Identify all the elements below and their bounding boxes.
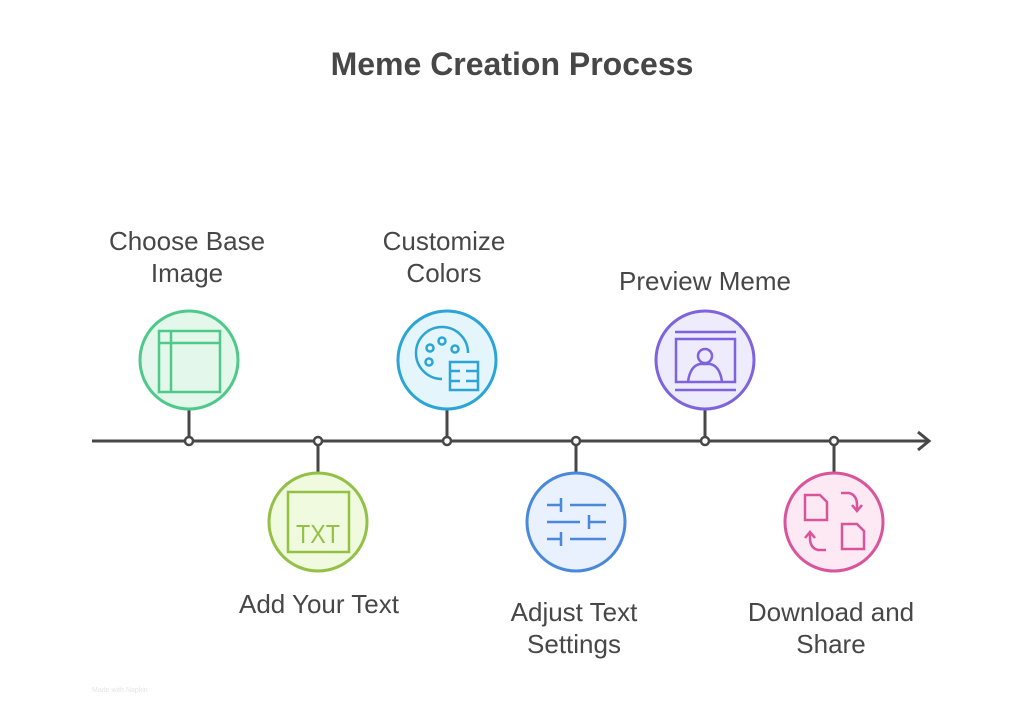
timeline arrow — [92, 432, 929, 450]
step 4: adjust text settings: Adjust Text — [511, 597, 638, 627]
step 6: download and share: Share — [796, 629, 866, 659]
step 3: customize colors: Customize — [383, 226, 505, 256]
step 2: add your text: TXT — [296, 519, 340, 549]
watermark: Made with Napkin — [92, 687, 148, 694]
step 6: download and share — [748, 437, 914, 659]
title: Meme Creation Process — [331, 46, 693, 82]
step 6: download and share: Download and — [748, 597, 914, 627]
step 5: preview meme — [619, 266, 791, 445]
step 4: adjust text settings: Settings — [527, 629, 621, 659]
step 2: add your text — [239, 437, 400, 619]
step 1: choose base image: Choose Base — [109, 226, 265, 256]
step 4: adjust text settings — [511, 437, 638, 659]
step 2: add your text: Add Your Text — [239, 589, 400, 619]
step 1: choose base image: Image — [151, 258, 223, 288]
step 3: customize colors — [383, 226, 505, 445]
step 3: customize colors: Colors — [406, 258, 482, 288]
step 5: preview meme: Preview Meme — [619, 266, 791, 296]
step 1: choose base image — [109, 226, 265, 445]
